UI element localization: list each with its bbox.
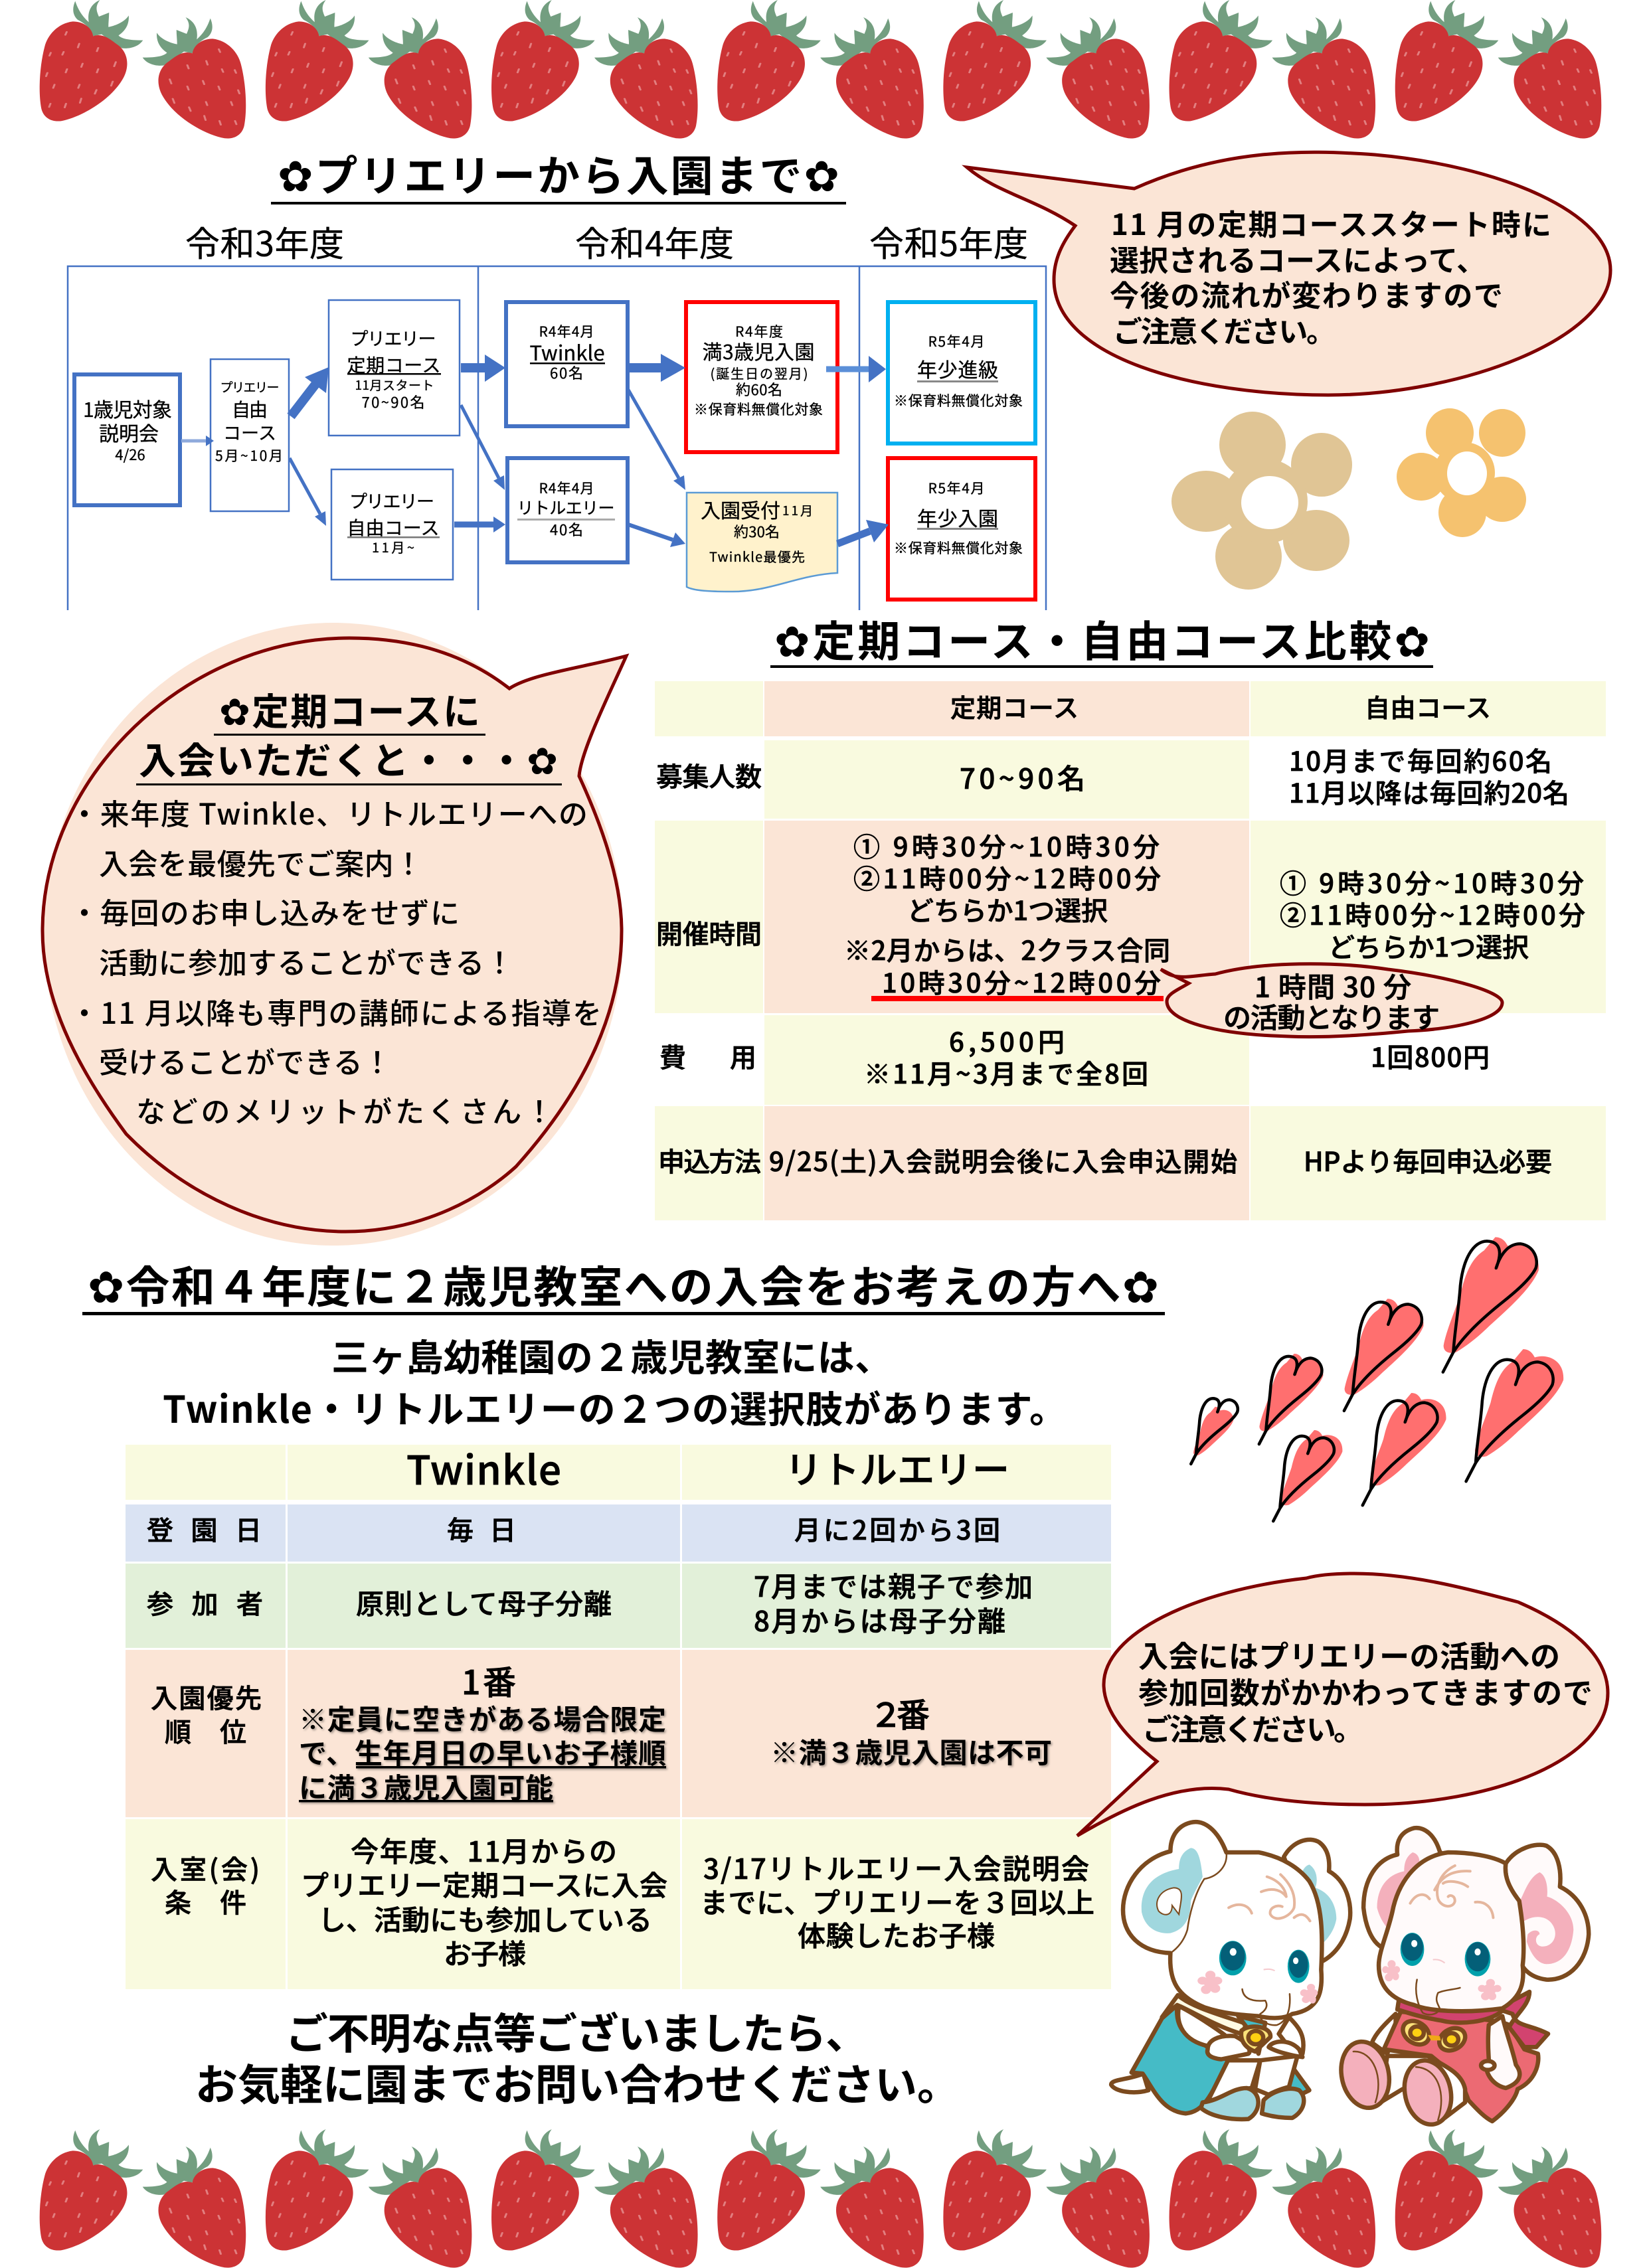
callout bullet list: 活動に参加することができる！ xyxy=(99,939,514,982)
box: free course May to October: 5月~10月 xyxy=(215,446,283,465)
row: capacity: 10月まで毎回約60名 xyxy=(1289,740,1552,779)
table: Twinkle vs Little Ellie xyxy=(126,1439,1111,1989)
row: cost: 費 用 xyxy=(659,1036,756,1075)
box: 3-year class admission: 年少入園 xyxy=(917,503,998,532)
box: Twinkle: Twinkle xyxy=(530,337,604,366)
row: admission priority: 入園優先 xyxy=(151,1677,262,1716)
box: age-3 admission: 満3歳児入園 xyxy=(703,336,814,365)
icon: flying hearts xyxy=(1191,1237,1563,1521)
box: Little Ellie xyxy=(507,458,628,562)
row: attendance days: 登 園 日 xyxy=(147,1509,262,1548)
row: how to apply xyxy=(655,1106,1606,1220)
box: regular pre-entry course xyxy=(329,300,460,436)
box: briefing for one-year-olds: 説明会 xyxy=(99,418,159,447)
row: entry conditions: までに、プリエリーを３回以上 xyxy=(700,1881,1094,1921)
box: regular pre-entry course: プリエリー xyxy=(351,325,436,351)
box: free course May to October: 自由 xyxy=(232,396,268,422)
box: Little Ellie: 40名 xyxy=(550,519,583,540)
box: free pre-entry course: 自由コース xyxy=(347,514,440,540)
box: age-3 admission: R4年度 xyxy=(735,321,783,341)
heading: pre-entry to admission: ✿プリエリーから入園まで✿ xyxy=(278,143,839,204)
row: cost: 6,500円 xyxy=(949,1021,1065,1060)
row: admission priority: ※定員に空きがある場合限定 xyxy=(299,1698,666,1738)
box: briefing for one-year-olds: 1歳児対象 xyxy=(83,394,172,423)
row: capacity: 11月以降は毎回約20名 xyxy=(1289,772,1569,811)
closing message xyxy=(195,2000,960,2113)
callout bullet list: などのメリットがたくさん！ xyxy=(136,1088,554,1131)
row: participants xyxy=(126,1564,1111,1648)
callout: course choice changes the path: ご注意ください。 xyxy=(1113,308,1336,351)
callout: participation count matters: 参加回数がかかわってきますので xyxy=(1138,1669,1593,1712)
box: age-3 admission: 約60名 xyxy=(736,378,782,400)
row: admission priority: ２番 xyxy=(869,1689,930,1737)
document: admission application: Twinkle最優先 xyxy=(709,546,805,566)
row: capacity xyxy=(656,740,1569,819)
callout: 90-minute session: の活動となります xyxy=(1223,996,1440,1036)
header row xyxy=(655,681,1606,736)
row: times: ②11時00分~12時00分 xyxy=(853,858,1161,896)
row: participants: 7月までは親子で参加 xyxy=(754,1565,1033,1605)
callout bullet list: ・来年度 Twinkle、リトルエリーへの xyxy=(70,791,588,833)
document: admission application xyxy=(687,493,837,592)
row: cost xyxy=(659,1015,1490,1105)
callout bullet list: 受けることができる！ xyxy=(99,1039,392,1082)
document: admission application: 約30名 xyxy=(734,521,780,542)
row: admission priority: で、生年月日の早いお子様順 xyxy=(299,1732,666,1772)
callout: participation count matters: 入会にはプリエリーの活動への xyxy=(1138,1633,1560,1676)
callout: 90-minute session xyxy=(1161,964,1502,1037)
header row: 自由コース xyxy=(1365,688,1491,724)
callout heading xyxy=(136,683,562,785)
icon: orange flower xyxy=(1397,408,1526,537)
flow arrows xyxy=(181,354,889,547)
header row: Twinkle xyxy=(406,1439,561,1497)
document: admission application: 入園受付 xyxy=(701,495,780,524)
box: Little Ellie: R4年4月 xyxy=(539,478,594,498)
top strawberry border xyxy=(40,0,1601,139)
row: times: 開催時間 xyxy=(656,913,762,951)
box: 3-year class admission xyxy=(888,458,1035,600)
box: Little Ellie: リトルエリー xyxy=(517,495,615,519)
row: cost: ※11月~3月まで全8回 xyxy=(864,1053,1148,1092)
row: participants: 原則として母子分離 xyxy=(356,1582,612,1623)
heading: two-year-old class: ✿令和４年度に２歳児教室への入会をお考えの方へ✿ xyxy=(88,1252,1159,1316)
box: free pre-entry course: プリエリー xyxy=(349,487,434,513)
box: Twinkle: 60名 xyxy=(550,362,583,383)
row: times xyxy=(655,821,1606,1013)
row: how to apply: 9/25(土)入会説明会後に入会申込開始 xyxy=(769,1141,1237,1179)
header row xyxy=(126,1439,1111,1500)
row: times: ※2月からは、2クラス合同 xyxy=(844,930,1170,968)
flow diagram: pre-entry to admission xyxy=(68,216,1046,610)
row: entry conditions: 条 件 xyxy=(165,1882,246,1920)
box: regular pre-entry course: 11月スタート xyxy=(355,376,434,394)
row: entry conditions: お子様 xyxy=(444,1932,526,1973)
callout: 90-minute session: 1 時間 30 分 xyxy=(1255,965,1411,1006)
year labels: 令和3年度 xyxy=(185,216,344,266)
header row: 定期コース xyxy=(950,688,1079,724)
callout: participation count matters: ご注意ください。 xyxy=(1142,1706,1363,1749)
mascots: two elephant characters xyxy=(1111,1822,1589,2126)
callout heading: 入会いただくと・・・✿ xyxy=(139,732,558,785)
header row: リトルエリー xyxy=(785,1441,1009,1495)
bottom strawberry border xyxy=(40,2129,1601,2268)
callout heading: ✿定期コースに xyxy=(219,683,480,736)
box: 3-year class admission: ※保育料無償化対象 xyxy=(894,538,1023,558)
year labels xyxy=(185,216,1028,266)
row: times: ① 9時30分~10時30分 xyxy=(853,826,1160,864)
closing message: お気軽に園までお問い合わせください。 xyxy=(195,2052,960,2113)
row: attendance days: 毎 日 xyxy=(447,1509,516,1548)
intro text xyxy=(163,1329,1067,1434)
intro text: Twinkle・リトルエリーの２つの選択肢があります。 xyxy=(163,1380,1067,1434)
row: admission priority: 順 位 xyxy=(165,1711,246,1749)
callout bullet list: ・11 月以降も専門の講師による指導を xyxy=(70,990,602,1032)
row: capacity: 募集人数 xyxy=(656,756,762,794)
box: 3-year class promotion xyxy=(888,302,1035,444)
row: admission priority xyxy=(126,1650,1111,1817)
row: times: ②11時00分~12時00分 xyxy=(1280,894,1585,933)
document: admission application: 11月 xyxy=(782,501,813,519)
box: briefing for one-year-olds xyxy=(74,374,180,505)
mascot: blue elephant xyxy=(1111,1822,1350,2119)
box: free pre-entry course: 11月~ xyxy=(372,537,414,556)
row: participants: 8月からは母子分離 xyxy=(754,1599,1005,1640)
callout: course choice changes the path xyxy=(967,152,1610,395)
row: entry conditions: プリエリー定期コースに入会 xyxy=(301,1864,667,1904)
box: regular pre-entry course: 70~90名 xyxy=(361,391,425,412)
callout: course choice changes the path: 今後の流れが変わりますので xyxy=(1110,272,1503,315)
row: entry conditions xyxy=(126,1819,1111,1989)
row: attendance days xyxy=(126,1504,1111,1562)
callout: participation count matters xyxy=(1077,1574,1608,1836)
callout: course choice changes the path: 選択されるコースによって、 xyxy=(1110,237,1486,280)
row: entry conditions: 体験したお子様 xyxy=(798,1914,995,1955)
box: Twinkle: R4年4月 xyxy=(539,321,594,341)
box: 3-year class promotion: 年少進級 xyxy=(917,354,998,383)
mascot: pink elephant xyxy=(1337,1828,1589,2126)
row: times: ① 9時30分~10時30分 xyxy=(1280,862,1584,901)
box: briefing for one-year-olds: 4/26 xyxy=(115,444,145,465)
box: age-3 admission xyxy=(686,302,837,452)
row: times: どちらか1つ選択 xyxy=(1328,926,1529,965)
box: 3-year class admission: R5年4月 xyxy=(928,478,984,498)
row: entry conditions: 3/17リトルエリー入会説明会 xyxy=(703,1847,1089,1888)
callout bullet list: ・毎回のお申し込みをせずに xyxy=(70,890,460,932)
table: course comparison xyxy=(655,681,1606,1220)
year labels: 令和4年度 xyxy=(575,216,734,266)
box: 3-year class promotion: R5年4月 xyxy=(928,331,984,351)
box: free course May to October xyxy=(211,359,289,511)
box: age-3 admission: (誕生日の翌月) xyxy=(711,363,808,382)
row: admission priority: ※満３歳児入園は不可 xyxy=(770,1731,1052,1771)
callout bullet list: 入会を最優先でご案内！ xyxy=(99,841,423,883)
closing message: ご不明な点等ございましたら、 xyxy=(286,2000,868,2062)
box: regular pre-entry course: 定期コース xyxy=(347,351,441,378)
row: how to apply: HPより毎回申込必要 xyxy=(1304,1141,1552,1179)
callout bullet list xyxy=(70,791,602,1131)
intro text: 三ヶ島幼稚園の２歳児教室には、 xyxy=(331,1329,892,1382)
callout: benefits of the regular course xyxy=(43,623,626,1246)
box: 3-year class promotion: ※保育料無償化対象 xyxy=(894,390,1023,410)
row: times: どちらか1つ選択 xyxy=(907,890,1108,928)
row: entry conditions: 入室(会) xyxy=(151,1848,260,1887)
row: entry conditions: 今年度、11月からの xyxy=(351,1830,617,1870)
heading: course comparison: ✿定期コース・自由コース比較✿ xyxy=(774,608,1430,669)
row: times: 10時30分~12時00分 xyxy=(882,962,1161,1001)
callout: course choice changes the path: 11 月の定期コーススタート時に xyxy=(1111,201,1551,244)
row: participants: 参 加 者 xyxy=(147,1583,263,1621)
year labels: 令和5年度 xyxy=(869,216,1028,266)
box: free course May to October: プリエリー xyxy=(220,378,279,396)
row: how to apply: 申込方法 xyxy=(658,1141,761,1179)
box: free pre-entry course xyxy=(331,469,453,580)
box: age-3 admission: ※保育料無償化対象 xyxy=(694,399,823,419)
row: admission priority: 1番 xyxy=(462,1657,516,1704)
box: free course May to October: コース xyxy=(223,419,276,445)
row: admission priority: に満３歳児入園可能 xyxy=(299,1766,553,1807)
row: entry conditions: し、活動にも参加している xyxy=(318,1898,652,1939)
row: capacity: 70~90名 xyxy=(960,757,1085,797)
icon: tan flower xyxy=(1171,412,1352,590)
box: Twinkle xyxy=(506,302,628,426)
row: attendance days: 月に2回から3回 xyxy=(794,1509,1000,1548)
row: cost: 1回800円 xyxy=(1371,1036,1490,1075)
